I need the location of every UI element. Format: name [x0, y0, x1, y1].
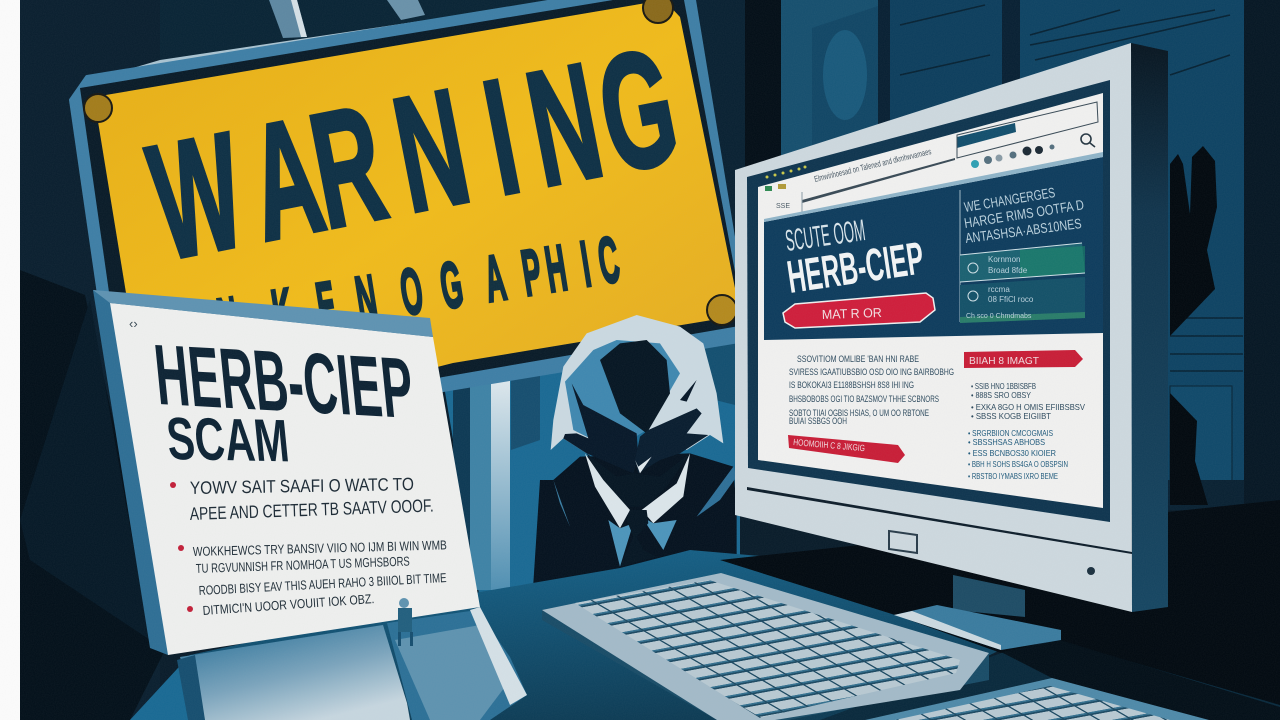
body left text: IS BOKOKAI3 E1188BSHSH 8S8 IHI ING — [789, 380, 914, 391]
panel: desk — [130, 500, 1280, 720]
panel: yellow warning sign — [71, 0, 745, 440]
body right list: • SRGRBIION CMCOGMAIS — [968, 428, 1053, 438]
sign corner bolts — [84, 0, 737, 325]
red arrow banner right: BIIAH 8 IMAGT — [969, 356, 1039, 367]
body left text: BHSBOBOBS OGI TIO BAZSMOV THHE SCBNORS — [789, 394, 939, 405]
bullet list: TU RGVUNNISH FR NOMHOA T US MGHSBORS — [196, 554, 410, 576]
info cards: Kornmon — [988, 255, 1020, 264]
sign subheading: N KENOGAPHIC — [213, 223, 624, 358]
panel: window below sign — [443, 325, 740, 600]
hero divider — [959, 190, 961, 322]
bullet list: ROODBI BISY EAV THIS AUEH RAHO 3 BIIIOL BIT TIME — [198, 570, 447, 598]
bullet list — [170, 474, 447, 618]
hooded figure — [533, 315, 737, 583]
tie — [620, 510, 657, 567]
browser toolbar — [765, 102, 1098, 212]
hero banner: SCUTE OOM — [783, 214, 867, 258]
browser toolbar: SSE — [776, 203, 790, 210]
body right list: • RBSTBO IYMABS IXRO BEME — [968, 471, 1058, 481]
body left text: SSOVITIOM OMLIBE 'BAN HNI RABE — [797, 354, 919, 365]
shirt — [608, 520, 633, 567]
info cards — [960, 243, 1085, 323]
bullet list: YOWV SAIT SAAFI O WATC TO — [190, 474, 414, 498]
power button — [889, 531, 917, 553]
red button — [783, 293, 935, 328]
hero heading: HERB-CIEP — [784, 231, 927, 303]
sign frame — [92, 0, 610, 80]
left mask — [563, 383, 638, 473]
second keyboard — [865, 678, 1209, 720]
hero right text: WE CHANGERGES — [963, 184, 1056, 215]
left wall silhouette — [20, 270, 165, 720]
monitor bezel — [735, 43, 1132, 612]
panel: herb-ciep scam paper — [93, 290, 480, 655]
right mask — [635, 408, 708, 473]
lower face — [587, 453, 690, 507]
body right list: • BBH H SOHS BS4GA O OBSPSIN — [968, 459, 1068, 469]
body left text: SVIRESS IGAATIUBSBIO OSD OIO ING BAIRBOBHG — [789, 367, 954, 378]
monitor stand — [894, 575, 1061, 650]
body right list: • SSIB HNO 1BBISBFB — [971, 381, 1036, 391]
screen frame — [747, 80, 1110, 522]
hero right text: ANTASHSA·ABS10NES — [964, 215, 1082, 246]
background silhouettes — [1170, 146, 1217, 505]
info cards: Ch sco 0 Chmdmabs — [966, 313, 1032, 320]
red arrow banner right — [964, 350, 1083, 368]
heading: SCAM: SCAM — [164, 405, 292, 474]
bullet list: WOKKHEWCS TRY BANSIV VIIO NO IJM BI WIN WMB — [193, 537, 447, 559]
suit — [533, 453, 737, 583]
hero banner — [764, 152, 1103, 340]
body right list: • SBSS KOGB EIGIIBT — [971, 411, 1051, 421]
background wall papers — [781, 0, 1244, 510]
browser window — [758, 93, 1103, 508]
area under monitor — [720, 500, 1280, 720]
red arrow banner left: HOOMOIIH C 8 JIKGIG — [793, 437, 865, 453]
window dots — [766, 166, 806, 178]
hero right text: HARGE RIMS OOTFA D — [963, 196, 1085, 231]
monitor — [735, 43, 1168, 612]
body left text: SOBTO TIIAI OGBIS HSIAS, O UM OO RBTONE — [789, 408, 929, 419]
power light — [1087, 567, 1095, 575]
body right list: • EXKA 8GO H OMIS EFIIBSBSV — [971, 402, 1085, 412]
body right list: • 888S SRO OBSY — [971, 390, 1031, 400]
heading: HERB-CIEP: HERB-CIEP — [150, 327, 417, 437]
heading: WARNING: WARNING — [137, 15, 691, 295]
arrows glyph: ‹› — [129, 316, 138, 331]
hero right text — [963, 184, 1085, 246]
tiny figure on book — [398, 598, 413, 646]
red button: MAT R OR — [822, 305, 882, 322]
body left text — [789, 354, 954, 427]
open book — [177, 598, 527, 720]
keyboard — [542, 573, 989, 720]
bezel line — [747, 487, 1132, 554]
dark face — [600, 340, 670, 433]
info cards: rccma — [988, 285, 1010, 294]
bullet list: APEE AND CETTER TB SAATV OOOF. — [189, 495, 434, 524]
info cards: 08 FfiCl roco — [988, 295, 1034, 304]
panel: blue paper edge — [93, 290, 433, 655]
collar — [585, 453, 630, 528]
body right list: • SBSSHSAS ABHOBS — [968, 437, 1045, 447]
keys — [575, 580, 960, 718]
body right list — [968, 381, 1085, 481]
red arrow banner left — [788, 435, 905, 463]
body left text: BUIAI SSBGS OOH — [789, 416, 847, 427]
browser toolbar: Elmwinhoesad on Tafened and dkmhwvamaes — [813, 146, 932, 184]
bullet list: DITMICI'N UOOR VOUIIT IOK OBZ. — [202, 591, 375, 618]
hood — [551, 315, 723, 453]
monitor side — [1131, 43, 1168, 612]
body right list: • ESS BCNBOS30 KIOIER — [968, 448, 1056, 458]
info cards: Broad 8fde — [988, 266, 1028, 275]
